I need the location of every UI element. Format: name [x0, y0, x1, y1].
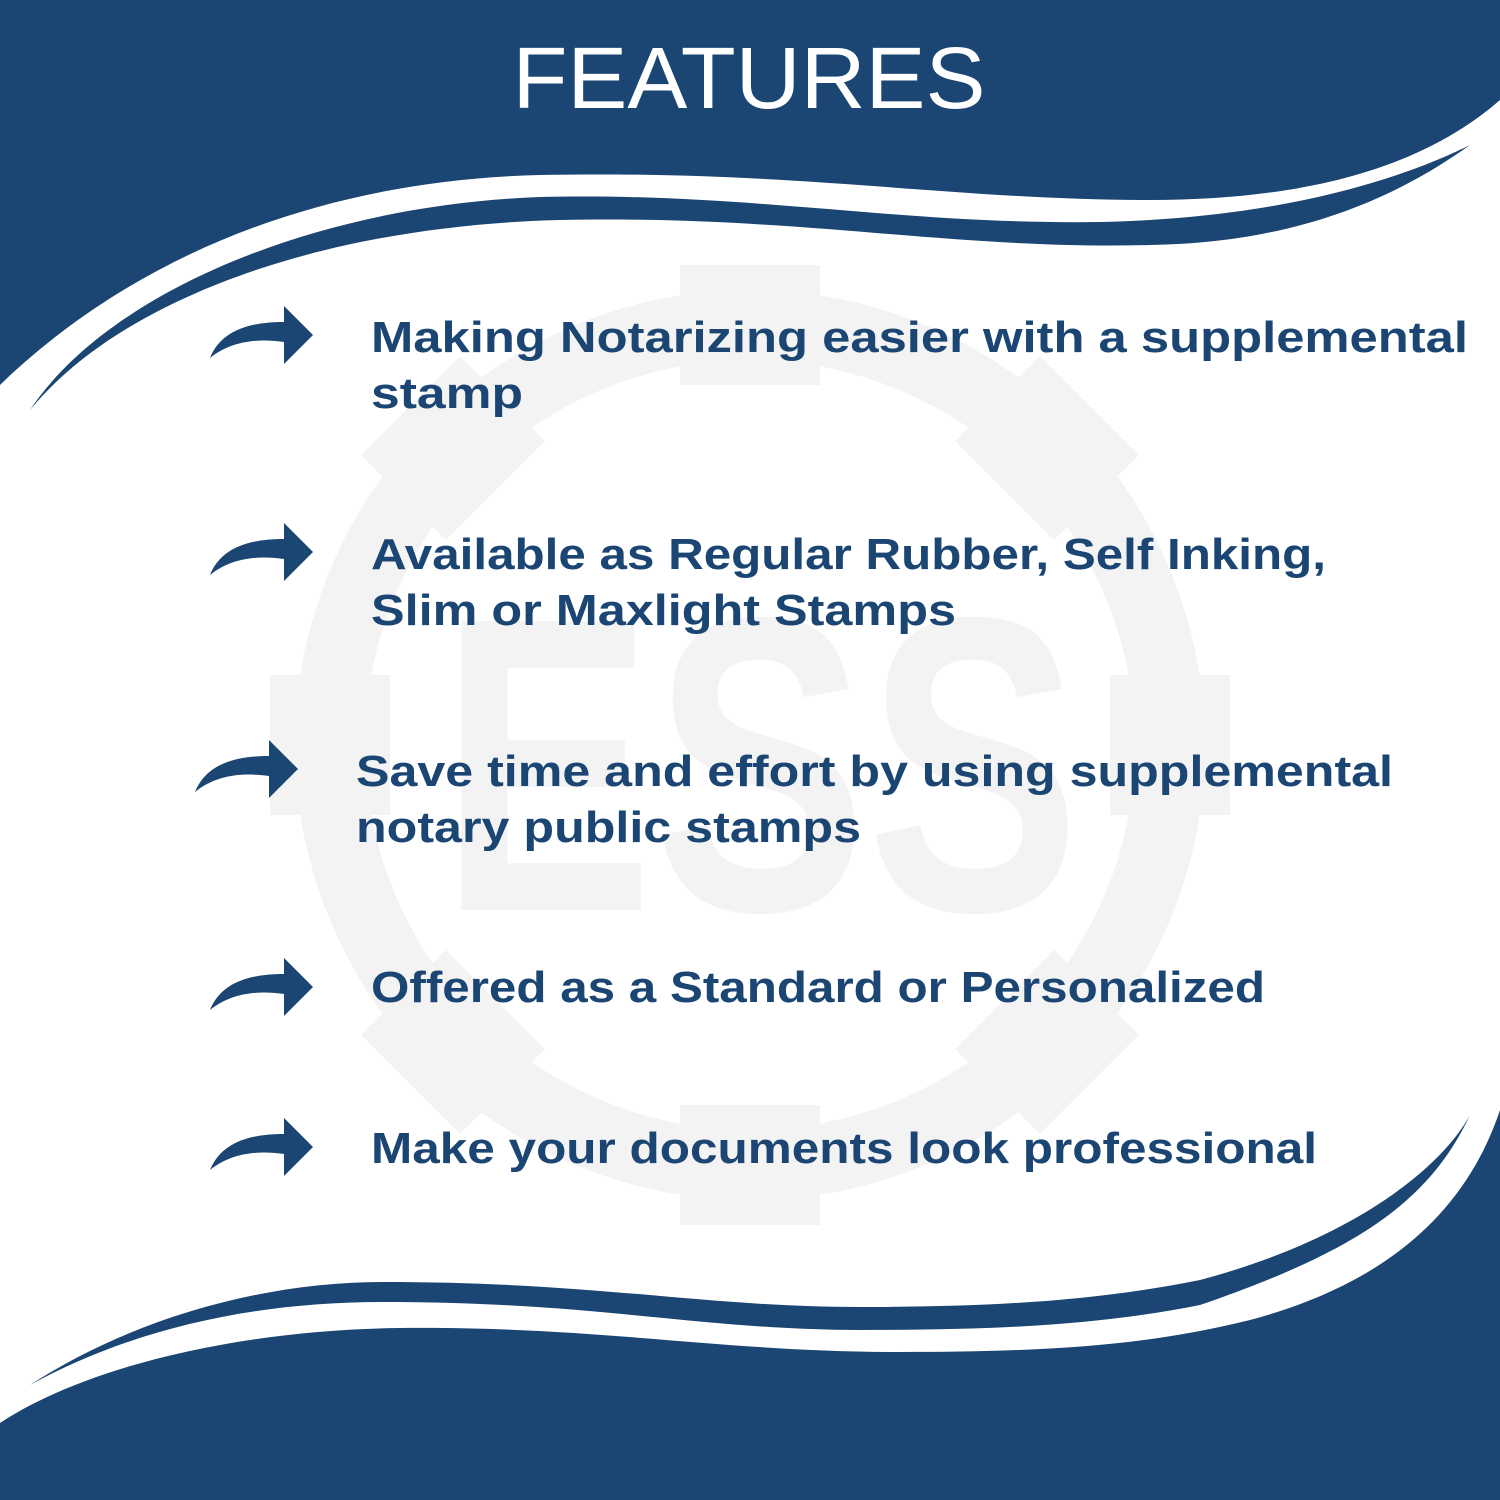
- feature 1: stamp: [371, 369, 523, 418]
- watermark: ESS gear logo: ESS: [440, 531, 1080, 1000]
- feature 3: Save time and effort by using supplemental: [356, 747, 1393, 796]
- icon: arrow 2: [210, 523, 313, 581]
- icon: arrow 3: [195, 740, 298, 798]
- feature 1: [210, 306, 1468, 418]
- feature 3: [195, 740, 1393, 852]
- feature 3: notary public stamps: [356, 803, 861, 852]
- icon: arrow 4: [210, 958, 313, 1016]
- watermark: ESS gear logo: [270, 265, 1230, 1225]
- feature 2: Slim or Maxlight Stamps: [371, 586, 956, 635]
- top wave band: [0, 0, 1500, 410]
- title: FEATURES: [512, 30, 986, 127]
- icon: arrow 5: [210, 1118, 313, 1176]
- feature 4: [210, 958, 1265, 1016]
- feature 4: Offered as a Standard or Personalized: [371, 963, 1265, 1012]
- feature 2: [210, 523, 1326, 635]
- icon: arrow 1: [210, 306, 313, 364]
- feature 1: Making Notarizing easier with a supplemental: [371, 313, 1468, 362]
- feature 5: [210, 1118, 1317, 1176]
- feature 2: Available as Regular Rubber, Self Inking,: [371, 530, 1326, 579]
- bottom wave band: [0, 1110, 1500, 1500]
- feature 5: Make your documents look professional: [371, 1124, 1317, 1173]
